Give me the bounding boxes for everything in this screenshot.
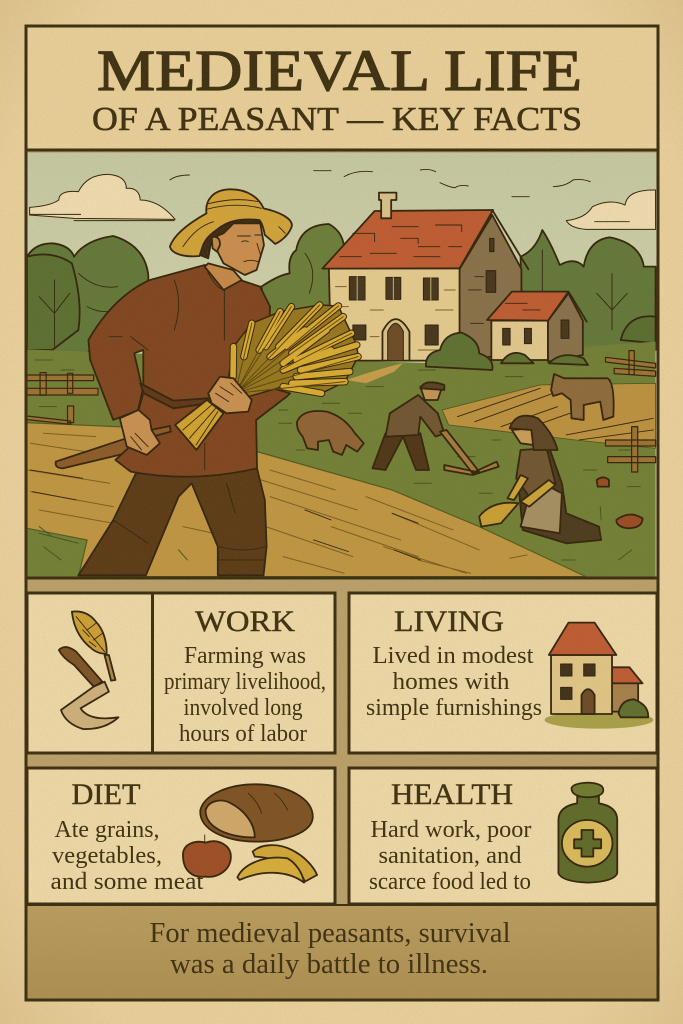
neck and head (205, 263, 242, 290)
panel: work (27, 593, 335, 753)
panel: living (349, 593, 657, 753)
text: living description: simple furnishings (366, 695, 542, 721)
heading: diet: DIET (72, 778, 140, 811)
tilled field foreground (27, 363, 656, 577)
illustration: peasant farm scene (27, 153, 656, 577)
text: diet description (50, 817, 204, 895)
icon: house (544, 623, 653, 729)
hand on handle (120, 410, 160, 455)
fences (27, 351, 656, 472)
panel: title band (26, 27, 658, 150)
text: health description: scarce food led to (369, 869, 531, 895)
distant farmer with hoe (372, 382, 499, 475)
belt (140, 383, 208, 408)
heading: work: WORK (195, 605, 295, 638)
main peasant (56, 189, 358, 575)
bushes (426, 333, 588, 370)
text: work description: Farming was (184, 643, 306, 669)
holding hand (208, 377, 252, 413)
text: conclusion: For medieval peasants, survival (150, 917, 510, 949)
sheep (297, 411, 364, 455)
text: living description: Lived in modest (372, 643, 534, 669)
text: work description (164, 643, 326, 747)
background trees (27, 224, 656, 353)
text: diet description: vegetables, (52, 843, 162, 869)
icon: bread, apple and bananas (183, 784, 317, 883)
text: diet description: and some meat (50, 869, 204, 895)
subtitle: OF A PEASANT — KEY FACTS (92, 101, 582, 138)
text: health description: sanitation, and (378, 843, 522, 869)
text: conclusion (150, 917, 510, 980)
frame line under illustration (26, 576, 658, 580)
straw hat (170, 189, 292, 256)
panel: health (349, 768, 657, 904)
grass field (27, 342, 656, 577)
text: work description: primary livelihood, (164, 669, 326, 695)
farmhouse (322, 193, 528, 363)
text: living description (366, 643, 542, 721)
text: work description: hours of labor (179, 721, 307, 747)
shirt (88, 265, 290, 477)
text: diet description: Ate grains, (54, 817, 160, 843)
text: living description: homes with (392, 669, 510, 695)
small house (487, 292, 587, 362)
clouds (30, 169, 656, 229)
icon: wheat and sickle (59, 611, 118, 729)
cow (551, 374, 614, 420)
apple (183, 841, 231, 877)
kneeling woman (479, 416, 643, 543)
text: health description: Hard work, poor (370, 817, 532, 843)
panel: diet (27, 768, 335, 904)
heading: health: HEALTH (391, 778, 513, 811)
trousers (78, 468, 267, 575)
wheat sheaf (175, 305, 358, 450)
scythe handle (56, 438, 133, 468)
text: health description (369, 817, 532, 895)
text: work description: involved long (184, 695, 302, 721)
scythe hook (150, 426, 171, 437)
bananas (253, 845, 317, 882)
text: conclusion: was a daily battle to illness. (170, 948, 488, 980)
icon: medicine bottle (558, 783, 617, 883)
title: MEDIEVAL LIFE (97, 38, 582, 103)
panel: conclusion band (26, 905, 658, 999)
heading: living: LIVING (394, 605, 504, 638)
bread (200, 784, 313, 842)
